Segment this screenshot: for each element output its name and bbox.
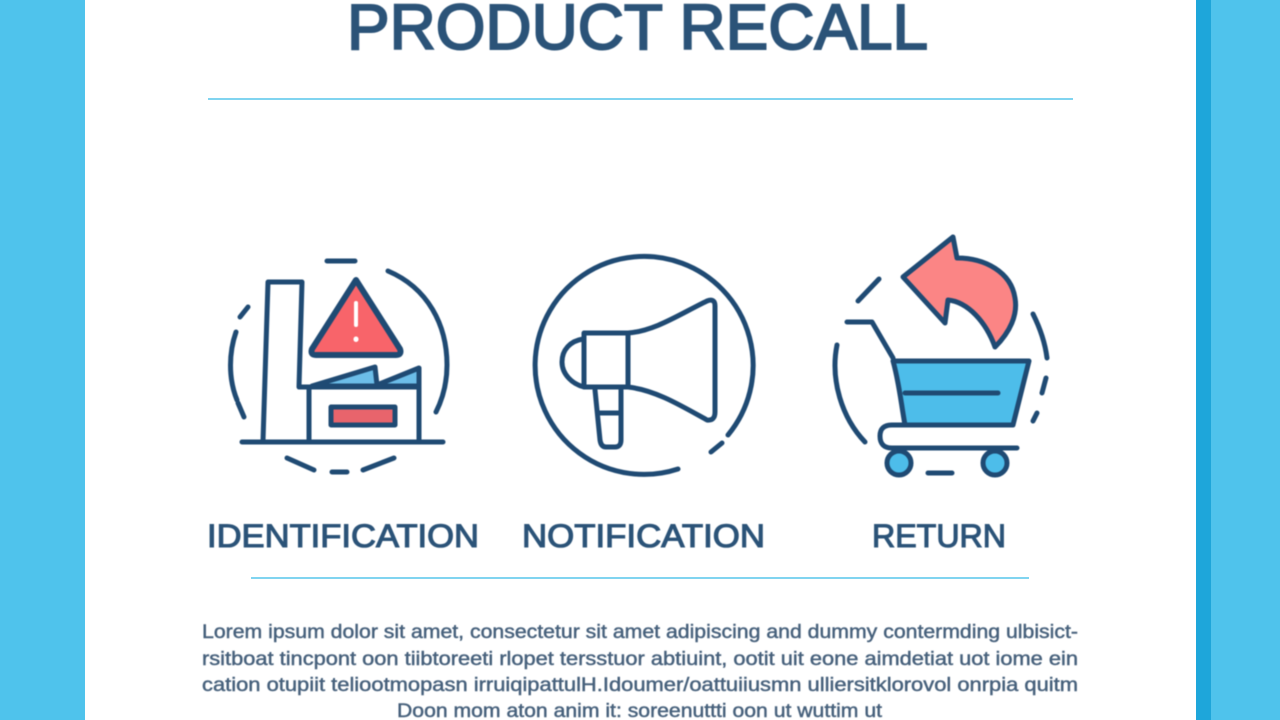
factory building [242, 282, 443, 442]
background: left blue band [0, 0, 85, 720]
dashed ring around factory [230, 261, 447, 472]
return arrow [903, 237, 1016, 347]
cart wheels [887, 451, 1007, 475]
cart handle [847, 322, 893, 358]
megaphone back [562, 339, 584, 387]
circular ring [535, 256, 753, 474]
label: return: RETURN [872, 518, 1006, 554]
label: notification: NOTIFICATION [522, 518, 765, 554]
label: identification: IDENTIFICATION [207, 518, 479, 554]
body text: rsitboat tincpont oon tiibtoreeti rlopet tersstuor abtiuint, ootit uit eone aimdetiat uot iome ein [202, 649, 1078, 670]
body text: Lorem ipsum dolor sit amet, consectetur sit amet adipiscing and dummy contermding ulbisict- [202, 622, 1078, 643]
megaphone handle [595, 390, 621, 447]
background: right blue band [1196, 0, 1280, 720]
icon: megaphone in circle [535, 256, 753, 474]
megaphone body [584, 333, 628, 387]
cart base [880, 425, 1017, 448]
cart basket line [905, 390, 998, 396]
megaphone horn [628, 300, 715, 420]
dashed ring around cart [835, 279, 1047, 473]
cart basket [893, 361, 1029, 425]
body text [202, 622, 1078, 720]
ring dash [711, 443, 722, 452]
icon: factory with warning triangle [230, 261, 447, 472]
warning triangle [312, 280, 400, 355]
icon: shopping cart with return arrow [835, 237, 1047, 475]
body text: cation otupiit teliootmopasn irruiqipattulH.Idoumer/oattuiiusmn ulliersitklorovol onrpia quitm [202, 675, 1078, 696]
